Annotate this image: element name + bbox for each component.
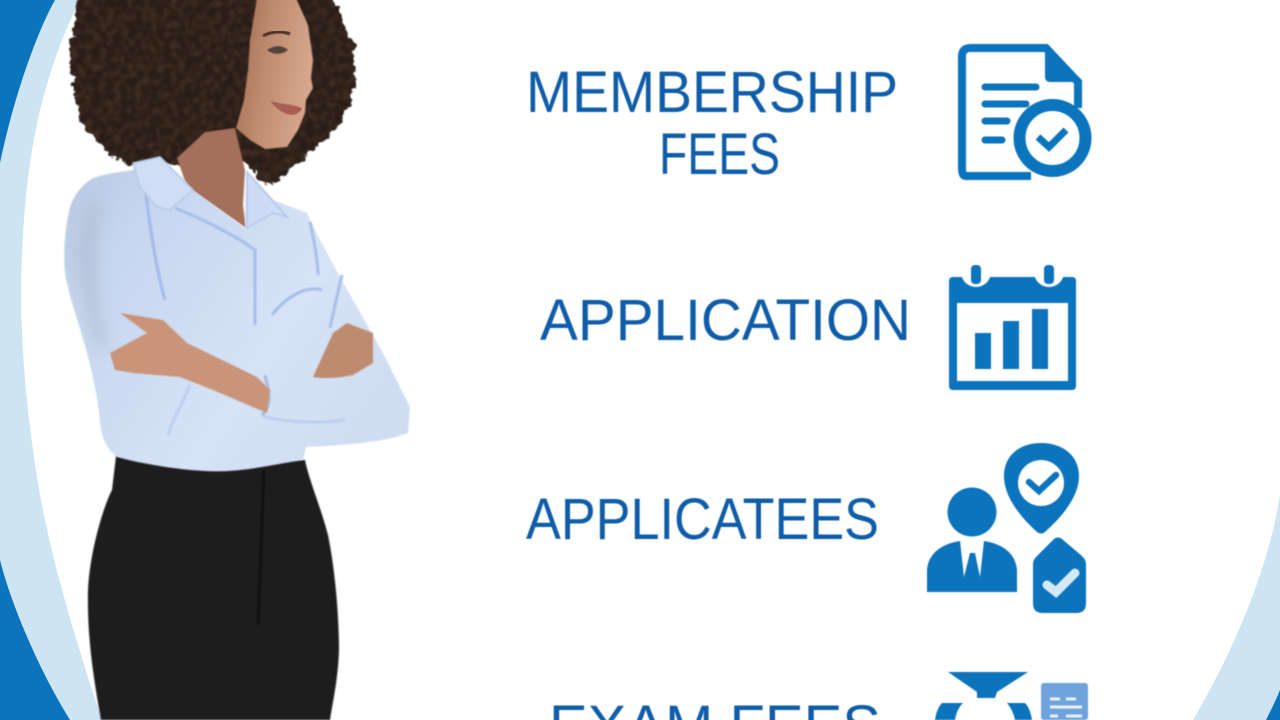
neck xyxy=(177,128,246,228)
person: woman with crossed arms xyxy=(64,0,410,720)
lips xyxy=(270,101,302,115)
icon: calendar with bars xyxy=(949,257,1076,390)
face xyxy=(236,0,313,149)
icon: applicant with location pin and tag xyxy=(927,443,1086,613)
eye xyxy=(267,46,288,54)
eyebrow xyxy=(263,32,290,36)
heading: membership fees: MEMBERSHIP xyxy=(526,60,898,125)
heading: membership fees xyxy=(526,60,898,187)
shirt folds xyxy=(146,195,345,435)
trousers xyxy=(88,456,339,720)
heading: application: APPLICATION xyxy=(540,288,911,353)
arc: bottom-right dark blue xyxy=(1266,690,1280,720)
arc: left light blue band xyxy=(0,0,102,720)
shirt body and arms xyxy=(64,157,410,471)
right hand and forearm xyxy=(313,323,373,378)
icon: exam scale and document xyxy=(935,672,1088,720)
icon: document with check xyxy=(962,46,1086,176)
heading: applicatees: APPLICATEES xyxy=(526,487,879,552)
sleeve shadow xyxy=(76,196,106,352)
heading: membership fees: FEES xyxy=(659,122,780,187)
arc: bottom-right light blue band xyxy=(1193,495,1280,720)
arc: bottom-left dark blue xyxy=(0,560,70,720)
arc: top-left dark blue xyxy=(0,0,55,163)
collar flaps xyxy=(133,157,193,210)
left hand and forearm xyxy=(110,313,270,413)
hair xyxy=(71,0,355,186)
